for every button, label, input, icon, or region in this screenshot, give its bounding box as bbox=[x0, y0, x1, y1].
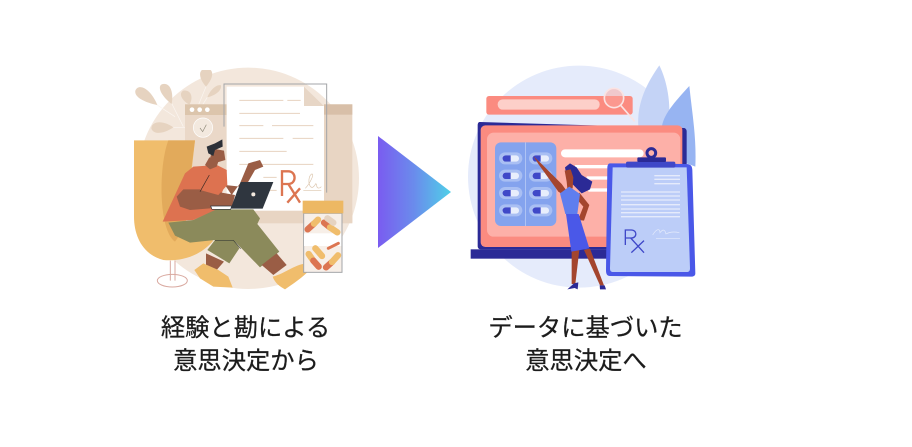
armchair bbox=[134, 140, 213, 260]
leaves bbox=[638, 65, 669, 127]
sleeve bbox=[200, 165, 227, 195]
clipboard bbox=[606, 149, 695, 277]
pill panel bbox=[495, 142, 556, 226]
caption right bbox=[488, 315, 683, 375]
arrow bbox=[378, 136, 451, 248]
chair stand bbox=[157, 261, 187, 287]
search bar bbox=[486, 96, 633, 115]
Rx mark bbox=[282, 171, 300, 203]
shoes bbox=[567, 282, 578, 289]
laptop bbox=[471, 122, 687, 259]
browser window right bbox=[324, 104, 352, 223]
background circle bbox=[138, 68, 359, 289]
forearm raised bbox=[225, 160, 263, 195]
legs bbox=[572, 250, 579, 284]
hair bbox=[565, 163, 592, 193]
caption right: データに基づいた bbox=[488, 315, 683, 342]
caption left bbox=[161, 315, 330, 375]
illustration: doctor with laptop bbox=[134, 68, 359, 289]
signature bbox=[303, 174, 321, 190]
dress top bbox=[560, 187, 580, 214]
back leg and shoe bbox=[206, 253, 224, 270]
skirt bbox=[566, 214, 589, 252]
shirt bbox=[163, 165, 227, 222]
trousers bbox=[168, 209, 279, 267]
pointing arm bbox=[533, 156, 566, 195]
caption right: 意思決定へ bbox=[525, 348, 647, 375]
neck and head bbox=[205, 157, 219, 169]
leaves bbox=[135, 70, 221, 133]
prescription document bbox=[224, 84, 327, 211]
hair bbox=[207, 139, 223, 156]
magnifier bbox=[604, 88, 635, 121]
check badge bbox=[193, 118, 213, 137]
caption left: 意思決定から bbox=[173, 348, 319, 375]
pill bottle bbox=[303, 201, 343, 272]
face and neck bbox=[565, 169, 573, 188]
arm bbox=[177, 189, 235, 210]
screen text bars bbox=[561, 149, 644, 192]
background circle bbox=[468, 66, 690, 288]
laptop bbox=[211, 182, 273, 209]
bent arm bbox=[576, 193, 589, 221]
front ankle and shoe bbox=[262, 253, 287, 275]
illustration: data-driven decision dashboard bbox=[468, 65, 696, 289]
browser window left bbox=[185, 104, 227, 181]
band under document bbox=[253, 211, 352, 223]
caption left: 経験と勘による bbox=[161, 315, 330, 342]
woman pointing bbox=[533, 156, 606, 289]
